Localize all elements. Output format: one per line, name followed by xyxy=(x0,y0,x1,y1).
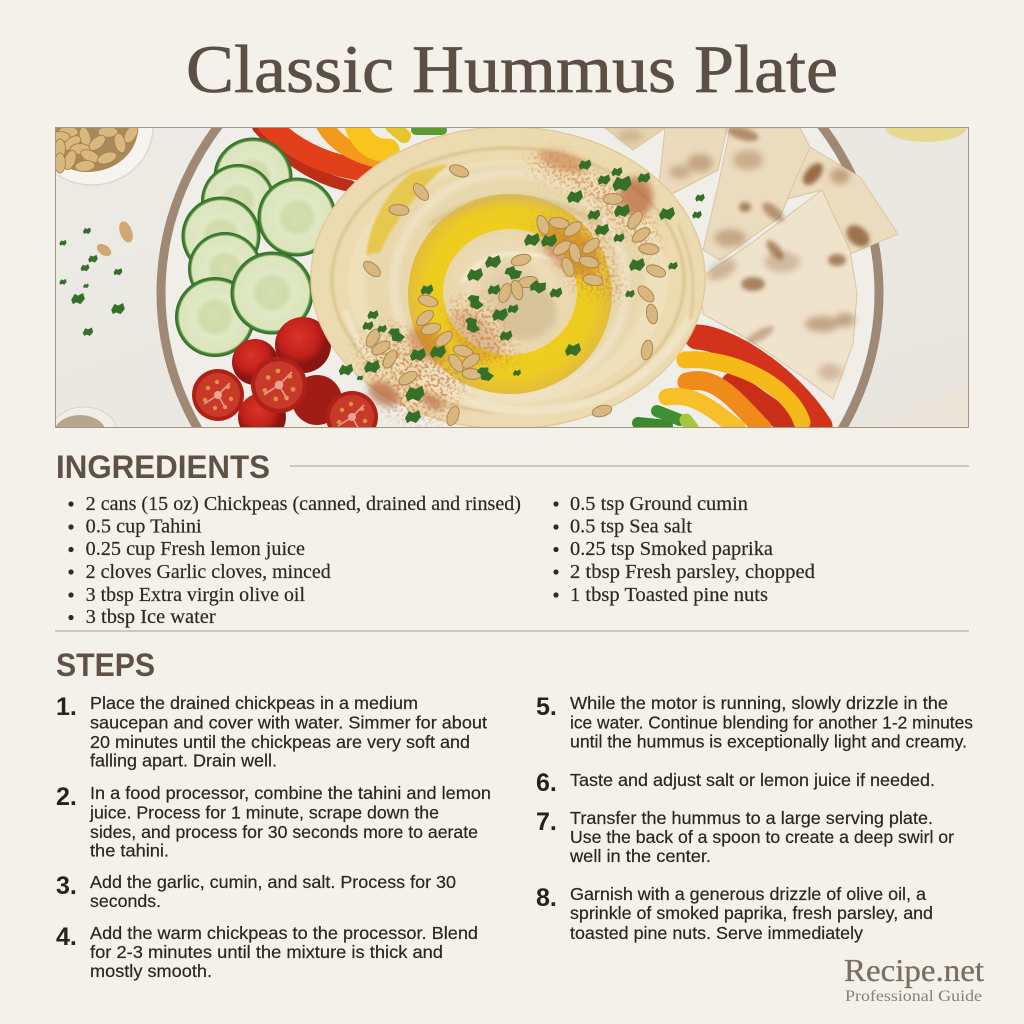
smoked paprika dusting xyxy=(364,146,653,415)
ingredients list: left column: 0.25 cup Fresh lemon juice xyxy=(86,539,305,560)
ingredients list: left column: 0.5 cup Tahini xyxy=(86,517,202,538)
step 3: Add the garlic, cumin, and salt. Process for 30 xyxy=(90,872,456,892)
ingredients list: left column: 3 tbsp Ice water xyxy=(86,607,216,628)
step 8: toasted pine nuts. Serve immediately xyxy=(570,923,863,943)
olive oil well xyxy=(408,194,612,394)
ingredients list: left column: 3 tbsp Extra virgin olive oil xyxy=(86,585,306,606)
step 4 xyxy=(56,923,478,981)
bell peppers bottom xyxy=(638,337,820,428)
step 7: 7. xyxy=(536,808,557,836)
tomatoes xyxy=(192,317,378,427)
linen cloth bottom-right xyxy=(903,384,969,428)
step 2: In a food processor, combine the tahini and lemon xyxy=(90,783,491,803)
hummus lower ridge xyxy=(420,318,690,411)
oil dish top-right xyxy=(885,128,967,142)
brand logo: Professional Guide xyxy=(845,988,982,1005)
step 8: 8. xyxy=(536,884,557,912)
step 2 xyxy=(56,783,491,860)
bell peppers top xyxy=(258,120,442,186)
step 5: While the motor is running, slowly drizzle in the xyxy=(570,693,948,713)
photo frame xyxy=(56,128,968,428)
ingredients list: right column: 0.5 tsp Sea salt xyxy=(570,517,693,538)
step 2: 2. xyxy=(56,783,77,811)
step 7 xyxy=(536,808,954,866)
ingredients list: right column: 0.5 tsp Ground cumin xyxy=(570,494,748,515)
step 3: 3. xyxy=(56,872,77,900)
step 7: well in the center. xyxy=(569,846,711,866)
step 1: falling apart. Drain well. xyxy=(90,750,277,770)
step 4: for 2-3 minutes until the mixture is thick and xyxy=(90,942,443,962)
ingredients list: right column xyxy=(553,494,815,606)
step 8: sprinkle of smoked paprika, fresh parsley, and xyxy=(570,903,933,923)
title: Classic Hummus Plate xyxy=(186,31,838,107)
hummus mound xyxy=(311,127,705,429)
steps heading: STEPS xyxy=(56,647,155,683)
step 7: Use the back of a spoon to create a deep swirl or xyxy=(570,827,954,847)
pita toasted spots xyxy=(618,124,874,380)
pine nuts xyxy=(361,163,667,427)
step 3: seconds. xyxy=(90,891,161,911)
ingredients list: right column: 1 tbsp Toasted pine nuts xyxy=(570,585,768,606)
step 5: 5. xyxy=(536,693,557,721)
small bowl bottom-left xyxy=(56,406,116,427)
brand logo: Recipe.net xyxy=(844,952,984,988)
step 1 xyxy=(56,693,487,770)
pita wedges xyxy=(605,128,898,399)
ingredients list: left column: 2 cans (15 oz) Chickpeas (canned, drained and rinsed) xyxy=(86,494,521,515)
bowl of pine nuts xyxy=(56,128,154,186)
step 5: ice water. Continue blending for another 1-2 minutes xyxy=(570,712,973,732)
brand logo xyxy=(844,952,984,1005)
step 6: Taste and adjust salt or lemon juice if needed. xyxy=(570,770,935,790)
ingredients list: right column: 2 tbsp Fresh parsley, chopped xyxy=(570,562,815,583)
step 5 xyxy=(536,693,973,752)
step 4: Add the warm chickpeas to the processor. Blend xyxy=(90,923,478,943)
step 6: 6. xyxy=(536,769,557,797)
step 2: the tahini. xyxy=(90,840,169,860)
step 2: sides, and process for 30 seconds more to aerate xyxy=(90,822,478,842)
step 1: 1. xyxy=(56,693,77,721)
step 4: mostly smooth. xyxy=(90,961,212,981)
step 8: Garnish with a generous drizzle of olive oil, a xyxy=(570,884,926,904)
parsley garnish xyxy=(339,159,705,423)
ingredients list: left column xyxy=(68,494,521,628)
step 1: 20 minutes until the chickpeas are very soft and xyxy=(90,732,470,752)
scattered parsley and pine nuts xyxy=(59,220,135,336)
step 7: Transfer the hummus to a large serving plate. xyxy=(570,808,933,828)
paprika speckle xyxy=(355,150,655,420)
olive oil upper-left streak xyxy=(366,164,448,255)
plate xyxy=(156,128,884,427)
ingredients list: left column: 2 cloves Garlic cloves, minced xyxy=(86,562,331,583)
step 2: juice. Process for 1 minute, scrape down the xyxy=(89,802,439,822)
ingredients list: right column: 0.25 tsp Smoked paprika xyxy=(570,539,773,560)
centre swirl xyxy=(443,229,577,355)
step 3 xyxy=(56,872,456,911)
step 1: Place the drained chickpeas in a medium xyxy=(90,693,418,713)
step 1: saucepan and cover with water. Simmer for about xyxy=(90,712,487,732)
step 5: until the hummus is exceptionally light and creamy. xyxy=(570,732,967,752)
step 6 xyxy=(536,769,935,797)
hero photo: hummus plate xyxy=(56,128,968,427)
ingredients heading: INGREDIENTS xyxy=(56,449,270,485)
cucumber slices xyxy=(175,138,336,357)
step 4: 4. xyxy=(56,923,77,951)
step 8 xyxy=(536,884,933,943)
